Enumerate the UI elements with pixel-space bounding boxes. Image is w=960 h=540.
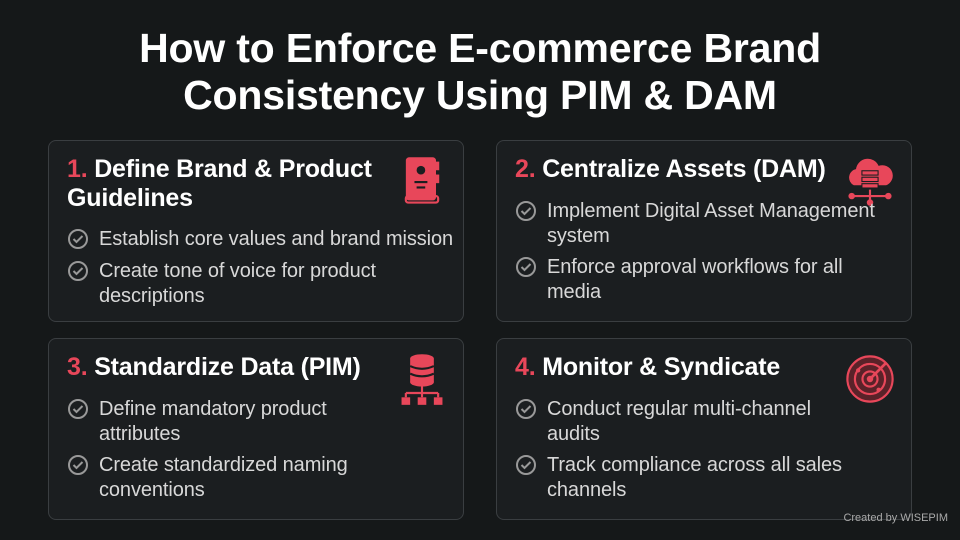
panel: monitor & syndicate: Track compliance across all sales — [547, 454, 842, 476]
title — [139, 25, 821, 118]
heading 1: Guidelines — [67, 184, 193, 212]
heading 3: 3. Standardize Data (PIM) — [67, 353, 361, 381]
heading 1: 1. Define Brand & Product — [67, 155, 372, 183]
panel: monitor & syndicate — [496, 338, 912, 520]
panel: monitor & syndicate: audits — [547, 422, 600, 444]
heading 1 — [67, 155, 372, 212]
panel: standardize data: Define mandatory product — [99, 398, 327, 420]
title: How to Enforce E-commerce Brand — [139, 25, 821, 71]
icon: cloud server — [848, 158, 893, 206]
panel: centralize assets: system — [547, 224, 610, 246]
panel: standardize data: conventions — [99, 478, 205, 500]
panel: centralize assets: Implement Digital Asset Management — [547, 200, 875, 222]
panel: define guidelines: Establish core values and brand mission — [99, 228, 453, 250]
panel: centralize assets: Enforce approval workflows for all — [547, 256, 843, 278]
panel: define guidelines: descriptions — [99, 284, 205, 306]
icon: guideline book — [404, 157, 440, 204]
title: Consistency Using PIM & DAM — [183, 72, 777, 118]
bullet 1 — [516, 398, 811, 444]
icon: radar — [846, 355, 894, 403]
bullet 2 — [68, 260, 376, 306]
bullet 2 — [68, 454, 348, 500]
heading 4: 4. Monitor & Syndicate — [515, 353, 780, 381]
bullet 1 — [68, 228, 453, 250]
icon: database hierarchy — [402, 354, 442, 405]
footer credit: Created by WISEPIM — [843, 512, 948, 524]
panel: standardize data — [48, 338, 464, 520]
panel: standardize data: attributes — [99, 422, 180, 444]
bullet 2 — [516, 454, 842, 500]
heading 2: 2. Centralize Assets (DAM) — [515, 155, 826, 183]
panel: monitor & syndicate: Conduct regular multi-channel — [547, 398, 811, 420]
panel: monitor & syndicate: channels — [547, 478, 626, 500]
panel: define guidelines — [48, 140, 464, 322]
panel: centralize assets: media — [547, 280, 601, 302]
panel: define guidelines: Create tone of voice for product — [99, 260, 376, 282]
panel: centralize assets — [496, 140, 912, 322]
bullet 1 — [516, 200, 875, 246]
bullet 1 — [68, 398, 327, 444]
panel: standardize data: Create standardized naming — [99, 454, 348, 476]
bullet 2 — [516, 256, 843, 302]
